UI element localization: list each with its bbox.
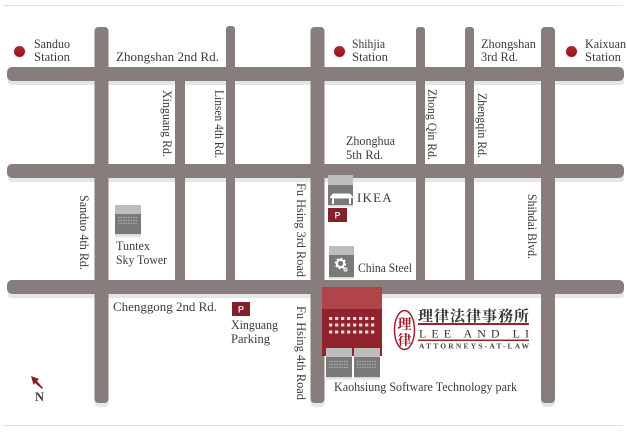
- label: Zhongshan 3rd Rd.: [481, 36, 536, 64]
- label: Xinguang Parking: Parking: [231, 331, 270, 346]
- label: Chenggong 2nd Rd.: Chenggong 2nd Rd.: [113, 299, 217, 314]
- label: Zhong Qin Rd.: Zhong Qin Rd.: [425, 89, 440, 160]
- label: Zhengqin Rd.: Zhengqin Rd.: [475, 93, 490, 158]
- label: Kaohsiung Software Technology park: Kaohsiung Software Technology park: [334, 379, 517, 394]
- label: Xinguang Parking: Xinguang: [231, 317, 278, 332]
- label: Xinguang Parking: [231, 317, 278, 346]
- road shadows: [8, 78, 624, 407]
- label: Fu Hsing 3rd Road: Fu Hsing 3rd Road: [294, 183, 309, 277]
- icon: Shihjia station marker: [332, 46, 346, 60]
- icon: Tuntex Sky Tower building: [115, 205, 141, 239]
- label: Tuntex Sky Tower: [116, 238, 168, 267]
- label: China Steel: China Steel: [358, 260, 412, 275]
- icon: IKEA building: [328, 175, 353, 208]
- label: N: N: [35, 390, 44, 404]
- icon: Xinguang parking: [232, 302, 250, 316]
- label: Sanduo Station: Sanduo: [34, 36, 70, 51]
- label: Kaixuan Station: [585, 36, 626, 64]
- icon: Xinguang parking: P: [238, 304, 244, 314]
- label: Sanduo Station: Station: [34, 49, 70, 64]
- logo: Lee and Li: LEE AND LI: [419, 326, 529, 340]
- label: Zhonghua 5th Rd.: 5th Rd.: [346, 147, 383, 162]
- label: Shihjia Station: Station: [352, 49, 388, 64]
- icon: IKEA parking: [328, 208, 347, 222]
- label: Shihdai Blvd.: Shihdai Blvd.: [525, 194, 540, 259]
- label: Shihjia Station: [352, 36, 388, 64]
- icon: Lee and Li office building: [322, 287, 382, 356]
- label: Shihjia Station: Shihjia: [352, 36, 385, 51]
- label: Tuntex Sky Tower: Tuntex: [116, 238, 150, 253]
- label: Zhonghua 5th Rd.: [346, 133, 395, 162]
- label: Kaixuan Station: Station: [585, 49, 621, 64]
- icon: Sanduo station marker: [12, 46, 26, 60]
- icon: Kaixuan station marker: [564, 46, 578, 60]
- label: Sanduo 4th Rd.: Sanduo 4th Rd.: [77, 195, 92, 270]
- label: Zhongshan 2nd Rd.: Zhongshan 2nd Rd.: [116, 49, 219, 64]
- label: Linsen 4th Rd.: Linsen 4th Rd.: [212, 90, 227, 158]
- label: Tuntex Sky Tower: Sky Tower: [116, 252, 168, 267]
- label: Zhonghua 5th Rd.: Zhonghua: [346, 133, 395, 148]
- label: Fu Hsing 4th Road: Fu Hsing 4th Road: [294, 306, 309, 400]
- logo: Lee and Li: ATTORNEYS-AT-LAW: [419, 342, 530, 350]
- logo: Lee and Li: 律: [398, 330, 412, 350]
- icon: Software Technology Park buildings: [326, 348, 380, 381]
- logo: Lee and Li: 理: [398, 314, 412, 334]
- logo: Lee and Li: [394, 305, 530, 350]
- label: IKEA: IKEA: [357, 190, 393, 205]
- icon: north arrow: [31, 376, 43, 389]
- label: Sanduo Station: [34, 36, 70, 64]
- label: Zhongshan 3rd Rd.: Zhongshan: [481, 36, 536, 51]
- icon: IKEA parking: P: [334, 210, 341, 220]
- icon: China Steel building: [329, 246, 354, 280]
- label: Zhongshan 3rd Rd.: 3rd Rd.: [481, 49, 518, 64]
- logo: Lee and Li: 理律法律事務所: [418, 305, 529, 326]
- label: Xinguang Rd.: Xinguang Rd.: [160, 90, 175, 157]
